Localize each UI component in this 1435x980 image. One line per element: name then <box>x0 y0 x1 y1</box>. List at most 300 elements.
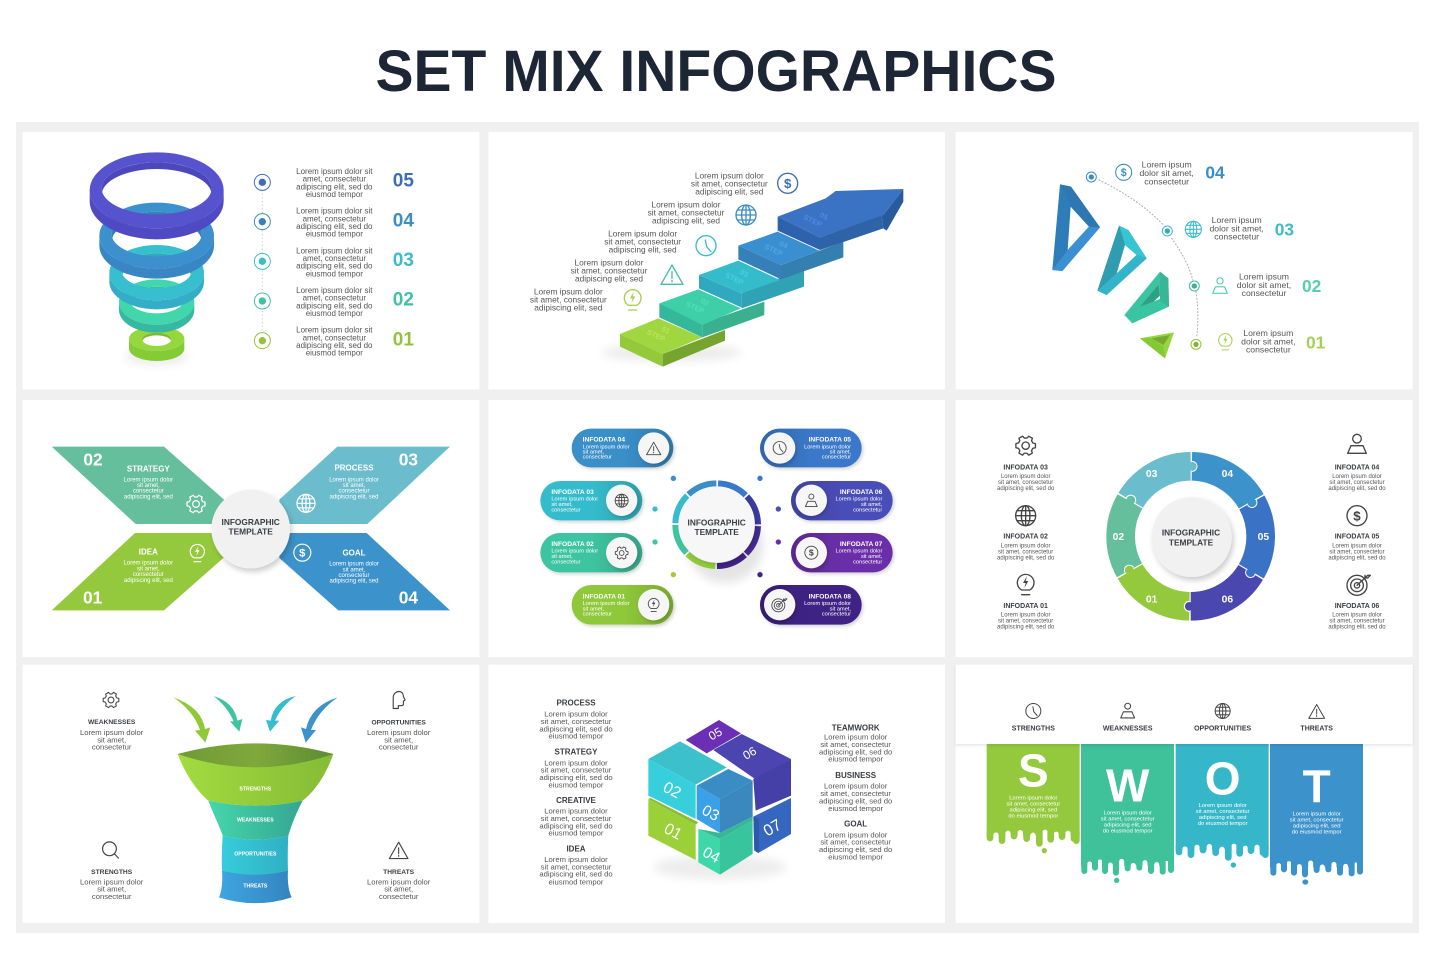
icon: bulb <box>190 544 204 562</box>
panel: impossible triangles <box>956 132 1413 389</box>
pill 06 <box>791 481 893 520</box>
funnel layer weaknesses <box>208 801 303 840</box>
center text: INFOGRAPHIC <box>688 517 746 527</box>
text 04: Lorem ipsum dolor <box>583 444 630 450</box>
text 01: consectetur <box>583 612 612 618</box>
block 05: 05 <box>706 724 725 743</box>
text threats: consectetur <box>379 892 419 901</box>
step 02: 02 <box>699 296 710 308</box>
text 01: Lorem ipsum dolor sit <box>296 326 373 335</box>
segment numbers: 03 <box>1146 469 1158 480</box>
icon: clock <box>696 236 716 256</box>
text process: PROCESS <box>334 464 374 473</box>
title: SET MIX INFOGRAPHICS <box>376 39 1056 104</box>
text opportunities: Lorem ipsum dolor <box>367 728 431 737</box>
text idea: IDEA <box>139 548 158 557</box>
text 01: eiusmod tempor <box>306 349 363 358</box>
text 02: amet, consectetur <box>303 294 366 303</box>
icon: dollar <box>805 546 818 559</box>
step 03 <box>699 261 804 308</box>
block 06: 06 <box>740 744 759 763</box>
text idea: sit amet, consectetur <box>541 862 612 871</box>
number 01: 01 <box>393 329 414 350</box>
center text: INFOGRAPHIC <box>222 517 280 527</box>
block 06 <box>713 734 791 811</box>
letter O: O <box>1205 753 1241 805</box>
text business: eiusmod tempor <box>828 804 884 813</box>
icon: dollar: $ <box>784 176 792 191</box>
text teamwork: adipiscing elit, sed do <box>819 747 892 756</box>
text T: do eiusmod tempor <box>1292 830 1342 836</box>
text infodata 05: Lorem ipsum dolor <box>1332 543 1382 549</box>
segment numbers: 02 <box>1113 532 1124 543</box>
text 03: INFODATA 03 <box>551 489 594 496</box>
circle 07 <box>796 537 827 568</box>
ring 05 <box>90 152 224 239</box>
text threats: THREATS <box>383 869 415 876</box>
icon: target <box>1347 575 1370 595</box>
icon: gear <box>615 547 628 559</box>
text idea: adipiscing elit, sed do <box>539 870 613 879</box>
puzzle segments <box>1095 440 1287 632</box>
pill 02 <box>540 533 642 572</box>
number 01: 01 <box>83 588 103 608</box>
number 03: 03 <box>393 250 414 271</box>
panel: eight pills <box>488 400 945 657</box>
center shadow <box>687 506 763 583</box>
text strategy: STRATEGY <box>127 465 170 474</box>
number 04: 04 <box>399 588 418 608</box>
text infodata 05: adipiscing elit, sed do <box>1328 555 1386 561</box>
text 08: consectetur <box>822 612 851 618</box>
text process: eiusmod tempor <box>549 732 604 741</box>
text T: adipiscing elit, sed <box>1293 824 1340 830</box>
text business: BUSINESS <box>835 771 877 780</box>
text 07: Lorem ipsum dolor <box>835 549 882 555</box>
text W: Lorem ipsum dolor <box>1104 811 1152 817</box>
text infodata 06: Lorem ipsum dolor <box>1332 613 1382 619</box>
ring 04 <box>99 203 214 279</box>
icon: globe <box>1016 506 1036 526</box>
text 04: eiusmod tempor <box>306 230 363 239</box>
column W <box>1081 742 1174 884</box>
text strategy: Lorem ipsum dolor <box>124 477 173 483</box>
text strengths: sit amet, <box>97 885 126 894</box>
text 04: sit amet, <box>583 449 604 455</box>
text T: Lorem ipsum dolor <box>1293 812 1341 818</box>
icon: globe <box>1185 221 1201 237</box>
text strategy: adipiscing elit, sed do <box>539 773 613 782</box>
text 05: consectetur <box>822 455 851 461</box>
arrow cyan <box>266 696 296 732</box>
text infodata 01: adipiscing elit, sed do <box>997 625 1055 631</box>
text step 01: sit amet, consectetur <box>530 295 607 305</box>
text step 01: adipiscing elit, sed <box>534 303 603 313</box>
text 07: consectetur <box>853 559 882 565</box>
text idea: eiusmod tempor <box>549 877 604 886</box>
text 08: sit amet, <box>830 606 851 612</box>
circle 03 <box>606 485 637 516</box>
step 01 <box>620 318 725 367</box>
text step 03: Lorem ipsum dolor <box>608 228 677 238</box>
text 05: INFODATA 05 <box>809 437 851 444</box>
text weaknesses: consectetur <box>92 742 132 751</box>
segment numbers: 01 <box>1146 594 1158 605</box>
text weaknesses: sit amet, <box>97 735 126 744</box>
marker 04 <box>1086 172 1096 182</box>
icon: gear <box>103 692 119 708</box>
text W: do eiusmod tempor <box>1103 829 1153 835</box>
text goal: GOAL <box>844 820 867 829</box>
text 05: eiusmod tempor <box>306 190 363 199</box>
triangle 03 <box>1097 226 1147 295</box>
block 01: 01 <box>661 820 685 844</box>
icon: person <box>805 494 817 507</box>
center circle <box>1152 497 1232 577</box>
text goal: sit amet, consectetur <box>820 838 891 847</box>
center text: TEMPLATE <box>1169 538 1214 548</box>
column O <box>1176 742 1269 868</box>
text infodata 03: INFODATA 03 <box>1003 464 1048 471</box>
text infodata 06: adipiscing elit, sed do <box>1328 625 1386 631</box>
text creative: eiusmod tempor <box>549 829 604 838</box>
text S: Lorem ipsum dolor <box>1009 796 1058 802</box>
block 02 <box>648 741 727 819</box>
text step 01: Lorem ipsum dolor <box>534 287 603 297</box>
text teamwork: TEAMWORK <box>832 723 880 732</box>
pill 03 <box>540 481 642 520</box>
marker 02 <box>1189 281 1199 291</box>
center text: INFOGRAPHIC <box>1162 528 1220 538</box>
icon: person <box>1121 703 1135 718</box>
text 02: consectetur <box>1242 288 1286 298</box>
text process: sit amet, <box>343 483 366 489</box>
text 01: INFODATA 01 <box>583 593 625 600</box>
text 03: amet, consectetur <box>303 254 366 263</box>
icon: clock <box>773 441 786 454</box>
pill 08 <box>760 585 862 625</box>
segment numbers: 06 <box>1222 594 1233 605</box>
text infodata 02: INFODATA 02 <box>1003 534 1048 541</box>
text infodata 02: sit amet, consectetur <box>998 549 1053 555</box>
panel: SWOT <box>956 665 1413 923</box>
text 02: adipiscing elit, sed do <box>296 301 373 310</box>
text weaknesses: Lorem ipsum dolor <box>80 728 144 737</box>
text 03: Lorem ipsum <box>1212 215 1262 225</box>
text business: sit amet, consectetur <box>820 789 891 798</box>
panel: isometric cube <box>488 665 945 923</box>
text business: Lorem ipsum dolor <box>824 782 888 791</box>
text strengths: consectetur <box>92 892 132 901</box>
text creative: CREATIVE <box>556 796 597 805</box>
text process: adipiscing elit, sed <box>330 495 378 501</box>
letter W: W <box>1106 759 1150 811</box>
text 07: INFODATA 07 <box>840 541 883 548</box>
text O: do eiusmod tempor <box>1198 821 1248 827</box>
text idea: consectetur <box>133 572 164 578</box>
marker 03 <box>1162 226 1172 236</box>
step 04: STEP <box>763 242 784 258</box>
text strengths: STRENGTHS <box>91 869 133 876</box>
text 04: INFODATA 04 <box>583 437 625 444</box>
ring 01 <box>129 326 184 361</box>
text step 03: sit amet, consectetur <box>604 236 681 246</box>
text infodata 04: sit amet, consectetur <box>1329 480 1385 486</box>
text 08: Lorem ipsum dolor <box>804 601 851 607</box>
center circle <box>679 487 755 563</box>
text 02: Lorem ipsum <box>1239 272 1289 282</box>
header labels: STRENGTHS <box>1012 725 1055 732</box>
text W: sit amet, consectetur <box>1101 817 1155 823</box>
icon: globe <box>1215 703 1230 718</box>
text 04: consectetur <box>583 455 612 461</box>
column T <box>1270 742 1363 886</box>
text weaknesses: WEAKNESSES <box>88 719 136 726</box>
text strategy: STRATEGY <box>555 748 598 757</box>
icon: dollar <box>1347 506 1367 526</box>
text 03: Lorem ipsum dolor <box>551 497 598 503</box>
text infodata 06: sit amet, consectetur <box>1329 619 1385 625</box>
text idea: Lorem ipsum dolor <box>124 561 173 567</box>
text business: adipiscing elit, sed do <box>819 797 892 806</box>
text infodata 04: INFODATA 04 <box>1335 464 1379 471</box>
text step 05: sit amet, consectetur <box>691 178 768 188</box>
text 05: sit amet, <box>830 449 851 455</box>
panel: four arrows template <box>23 400 479 657</box>
icon: bulb <box>648 598 659 612</box>
text 01: amet, consectetur <box>303 333 366 342</box>
text O: sit amet, consectetur <box>1196 809 1250 815</box>
icon: person <box>1348 434 1366 453</box>
text infodata 05: sit amet, consectetur <box>1329 549 1385 555</box>
icon: bulb <box>624 290 641 310</box>
text 05: adipiscing elit, sed do <box>296 182 373 191</box>
text process: PROCESS <box>556 699 596 708</box>
block 04: 04 <box>700 844 723 867</box>
icon: warning <box>1309 704 1325 718</box>
text 02: sit amet, <box>551 554 573 560</box>
funnel opening <box>178 743 333 767</box>
panel: staircase arrow <box>488 132 945 389</box>
text 02: dolor sit amet, <box>1237 280 1291 290</box>
icon: globe <box>297 494 315 512</box>
text step 02: adipiscing elit, sed <box>575 274 643 284</box>
text teamwork: sit amet, consectetur <box>820 740 891 749</box>
segment numbers: 05 <box>1258 532 1269 543</box>
text 04: dolor sit amet, <box>1139 168 1194 178</box>
icon: dollar <box>294 544 311 561</box>
text goal: Lorem ipsum dolor <box>329 562 379 568</box>
text goal: Lorem ipsum dolor <box>824 830 888 839</box>
triangle 02 <box>1124 272 1169 323</box>
text 03: Lorem ipsum dolor sit <box>296 246 373 255</box>
dotted arc <box>1099 180 1198 337</box>
text 05: Lorem ipsum dolor sit <box>296 167 373 176</box>
icon: globe <box>615 494 628 507</box>
text 01: Lorem ipsum <box>1243 328 1293 338</box>
text step 04: adipiscing elit, sed <box>652 215 720 225</box>
step 02: STEP <box>684 299 706 316</box>
text threats: sit amet, <box>384 885 413 894</box>
icon: dollar: $ <box>1353 508 1361 523</box>
panel: stacked rings <box>23 132 479 389</box>
icon: bulb <box>1017 574 1034 595</box>
text infodata 03: sit amet, consectetur <box>998 480 1053 486</box>
text goal: consectetur <box>339 573 369 579</box>
circle 04 <box>638 432 669 464</box>
icon: warning <box>647 442 661 455</box>
number 03: 03 <box>1275 219 1294 239</box>
block 03: 03 <box>699 802 722 825</box>
text process: Lorem ipsum dolor <box>544 710 608 719</box>
text 06: Lorem ipsum dolor <box>835 497 882 503</box>
text strategy: sit amet, <box>137 483 160 489</box>
text strategy: adipiscing elit, sed <box>124 495 173 501</box>
text 03: dolor sit amet, <box>1209 223 1264 233</box>
marker 01 <box>1191 339 1201 349</box>
icon: warning <box>389 842 408 859</box>
icon: globe <box>736 205 756 225</box>
marker 05 <box>254 174 270 190</box>
funnel labels: STRENGTHS <box>239 786 272 792</box>
text step 04: sit amet, consectetur <box>648 207 725 217</box>
circle 06 <box>796 485 827 516</box>
block 01 <box>648 798 698 860</box>
text 04: Lorem ipsum dolor sit <box>296 207 373 216</box>
circle 01 <box>638 589 669 620</box>
text 03: consectetur <box>551 507 581 513</box>
text 02: Lorem ipsum dolor sit <box>296 286 373 295</box>
text step 05: adipiscing elit, sed <box>695 186 764 196</box>
step 05 arrow: 05 <box>818 210 830 222</box>
text 02: eiusmod tempor <box>306 309 363 318</box>
text 04: consectetur <box>1144 176 1189 186</box>
text 01: dolor sit amet, <box>1241 336 1296 346</box>
center text: TEMPLATE <box>695 527 739 537</box>
text strategy: Lorem ipsum dolor <box>544 758 608 767</box>
circle 02 <box>606 537 637 568</box>
text infodata 02: adipiscing elit, sed do <box>997 555 1055 561</box>
text strengths: Lorem ipsum dolor <box>80 878 144 887</box>
icon: target <box>772 599 787 612</box>
block 07 <box>753 798 791 853</box>
text goal: GOAL <box>342 548 366 557</box>
ring 02 <box>119 279 194 333</box>
text O: Lorem ipsum dolor <box>1199 803 1247 809</box>
step 03: 03 <box>739 268 750 279</box>
text 03: consectetur <box>1214 231 1259 241</box>
step 04: 04 <box>778 239 790 251</box>
text opportunities: consectetur <box>379 742 419 751</box>
text infodata 01: sit amet, consectetur <box>998 619 1053 625</box>
text infodata 01: Lorem ipsum dolor <box>1001 613 1050 619</box>
step 05 arrow: STEP <box>802 213 823 229</box>
text infodata 03: adipiscing elit, sed do <box>997 486 1055 492</box>
pill 05 <box>760 429 862 467</box>
step 01: 01 <box>660 324 671 336</box>
text strategy: eiusmod tempor <box>549 780 604 789</box>
arrow green <box>173 697 210 743</box>
text teamwork: Lorem ipsum dolor <box>824 733 888 742</box>
text 06: consectetur <box>853 507 882 513</box>
icon: head <box>393 691 405 708</box>
icon: dollar <box>778 173 798 193</box>
text 01: Lorem ipsum dolor <box>583 601 630 607</box>
letter S: S <box>1018 744 1049 796</box>
funnel layer threats <box>219 871 292 903</box>
number 04: 04 <box>1205 163 1225 183</box>
arrow blue <box>301 697 338 743</box>
ring shadow <box>125 349 188 365</box>
column S <box>987 742 1080 854</box>
funnel labels: OPPORTUNITIES <box>234 851 277 857</box>
pill 01 <box>572 585 673 625</box>
text infodata 06: INFODATA 06 <box>1335 603 1379 610</box>
text T: sit amet, consectetur <box>1290 818 1344 824</box>
text idea: sit amet, <box>137 566 160 572</box>
text 06: sit amet, <box>861 502 883 508</box>
shape 02 strategy <box>52 447 224 524</box>
marker 01 <box>254 333 270 349</box>
header labels: THREATS <box>1300 725 1333 732</box>
text goal: adipiscing elit, sed <box>330 579 378 585</box>
text S: sit amet, consectetur <box>1006 802 1060 808</box>
text step 05: Lorem ipsum dolor <box>695 170 764 180</box>
text 03: eiusmod tempor <box>306 269 363 278</box>
text step 04: Lorem ipsum dolor <box>652 199 721 209</box>
step 03: STEP <box>724 271 745 287</box>
text process: consectetur <box>339 489 369 495</box>
header labels: OPPORTUNITIES <box>1194 725 1252 732</box>
text infodata 04: adipiscing elit, sed do <box>1328 486 1386 492</box>
panel: funnel <box>23 665 479 923</box>
text infodata 04: Lorem ipsum dolor <box>1332 474 1382 480</box>
text infodata 02: Lorem ipsum dolor <box>1001 543 1050 549</box>
number 02: 02 <box>83 449 103 469</box>
pill 04 <box>572 429 673 467</box>
circle 05 <box>764 432 795 464</box>
text 03: sit amet, <box>551 502 573 508</box>
segmented ring <box>658 466 775 583</box>
segment numbers: 04 <box>1222 469 1233 480</box>
block 02: 02 <box>660 779 684 802</box>
center circle <box>211 490 290 568</box>
connector dots <box>652 476 781 577</box>
header labels: WEAKNESSES <box>1103 725 1153 732</box>
icon: warning <box>661 265 683 284</box>
header band <box>956 665 1413 744</box>
pill 07 <box>791 533 893 572</box>
shape 04 goal <box>279 533 450 610</box>
text 04: Lorem ipsum <box>1142 160 1192 170</box>
icon: dollar: $ <box>809 548 814 558</box>
icon: dollar <box>1116 164 1132 180</box>
text 04: adipiscing elit, sed do <box>296 222 373 231</box>
text 04: amet, consectetur <box>303 214 366 223</box>
text teamwork: eiusmod tempor <box>828 755 884 764</box>
text opportunities: OPPORTUNITIES <box>371 720 426 727</box>
text 02: INFODATA 02 <box>551 541 594 548</box>
step 04 <box>738 232 843 279</box>
text 01: adipiscing elit, sed do <box>296 341 373 350</box>
text creative: sit amet, consectetur <box>541 814 612 823</box>
dotted connector <box>261 190 264 333</box>
marker 04 <box>254 214 270 230</box>
marker 02 <box>254 293 270 309</box>
icon: search <box>103 842 118 858</box>
text 03: adipiscing elit, sed do <box>296 262 373 271</box>
text step 02: sit amet, consectetur <box>571 265 648 275</box>
